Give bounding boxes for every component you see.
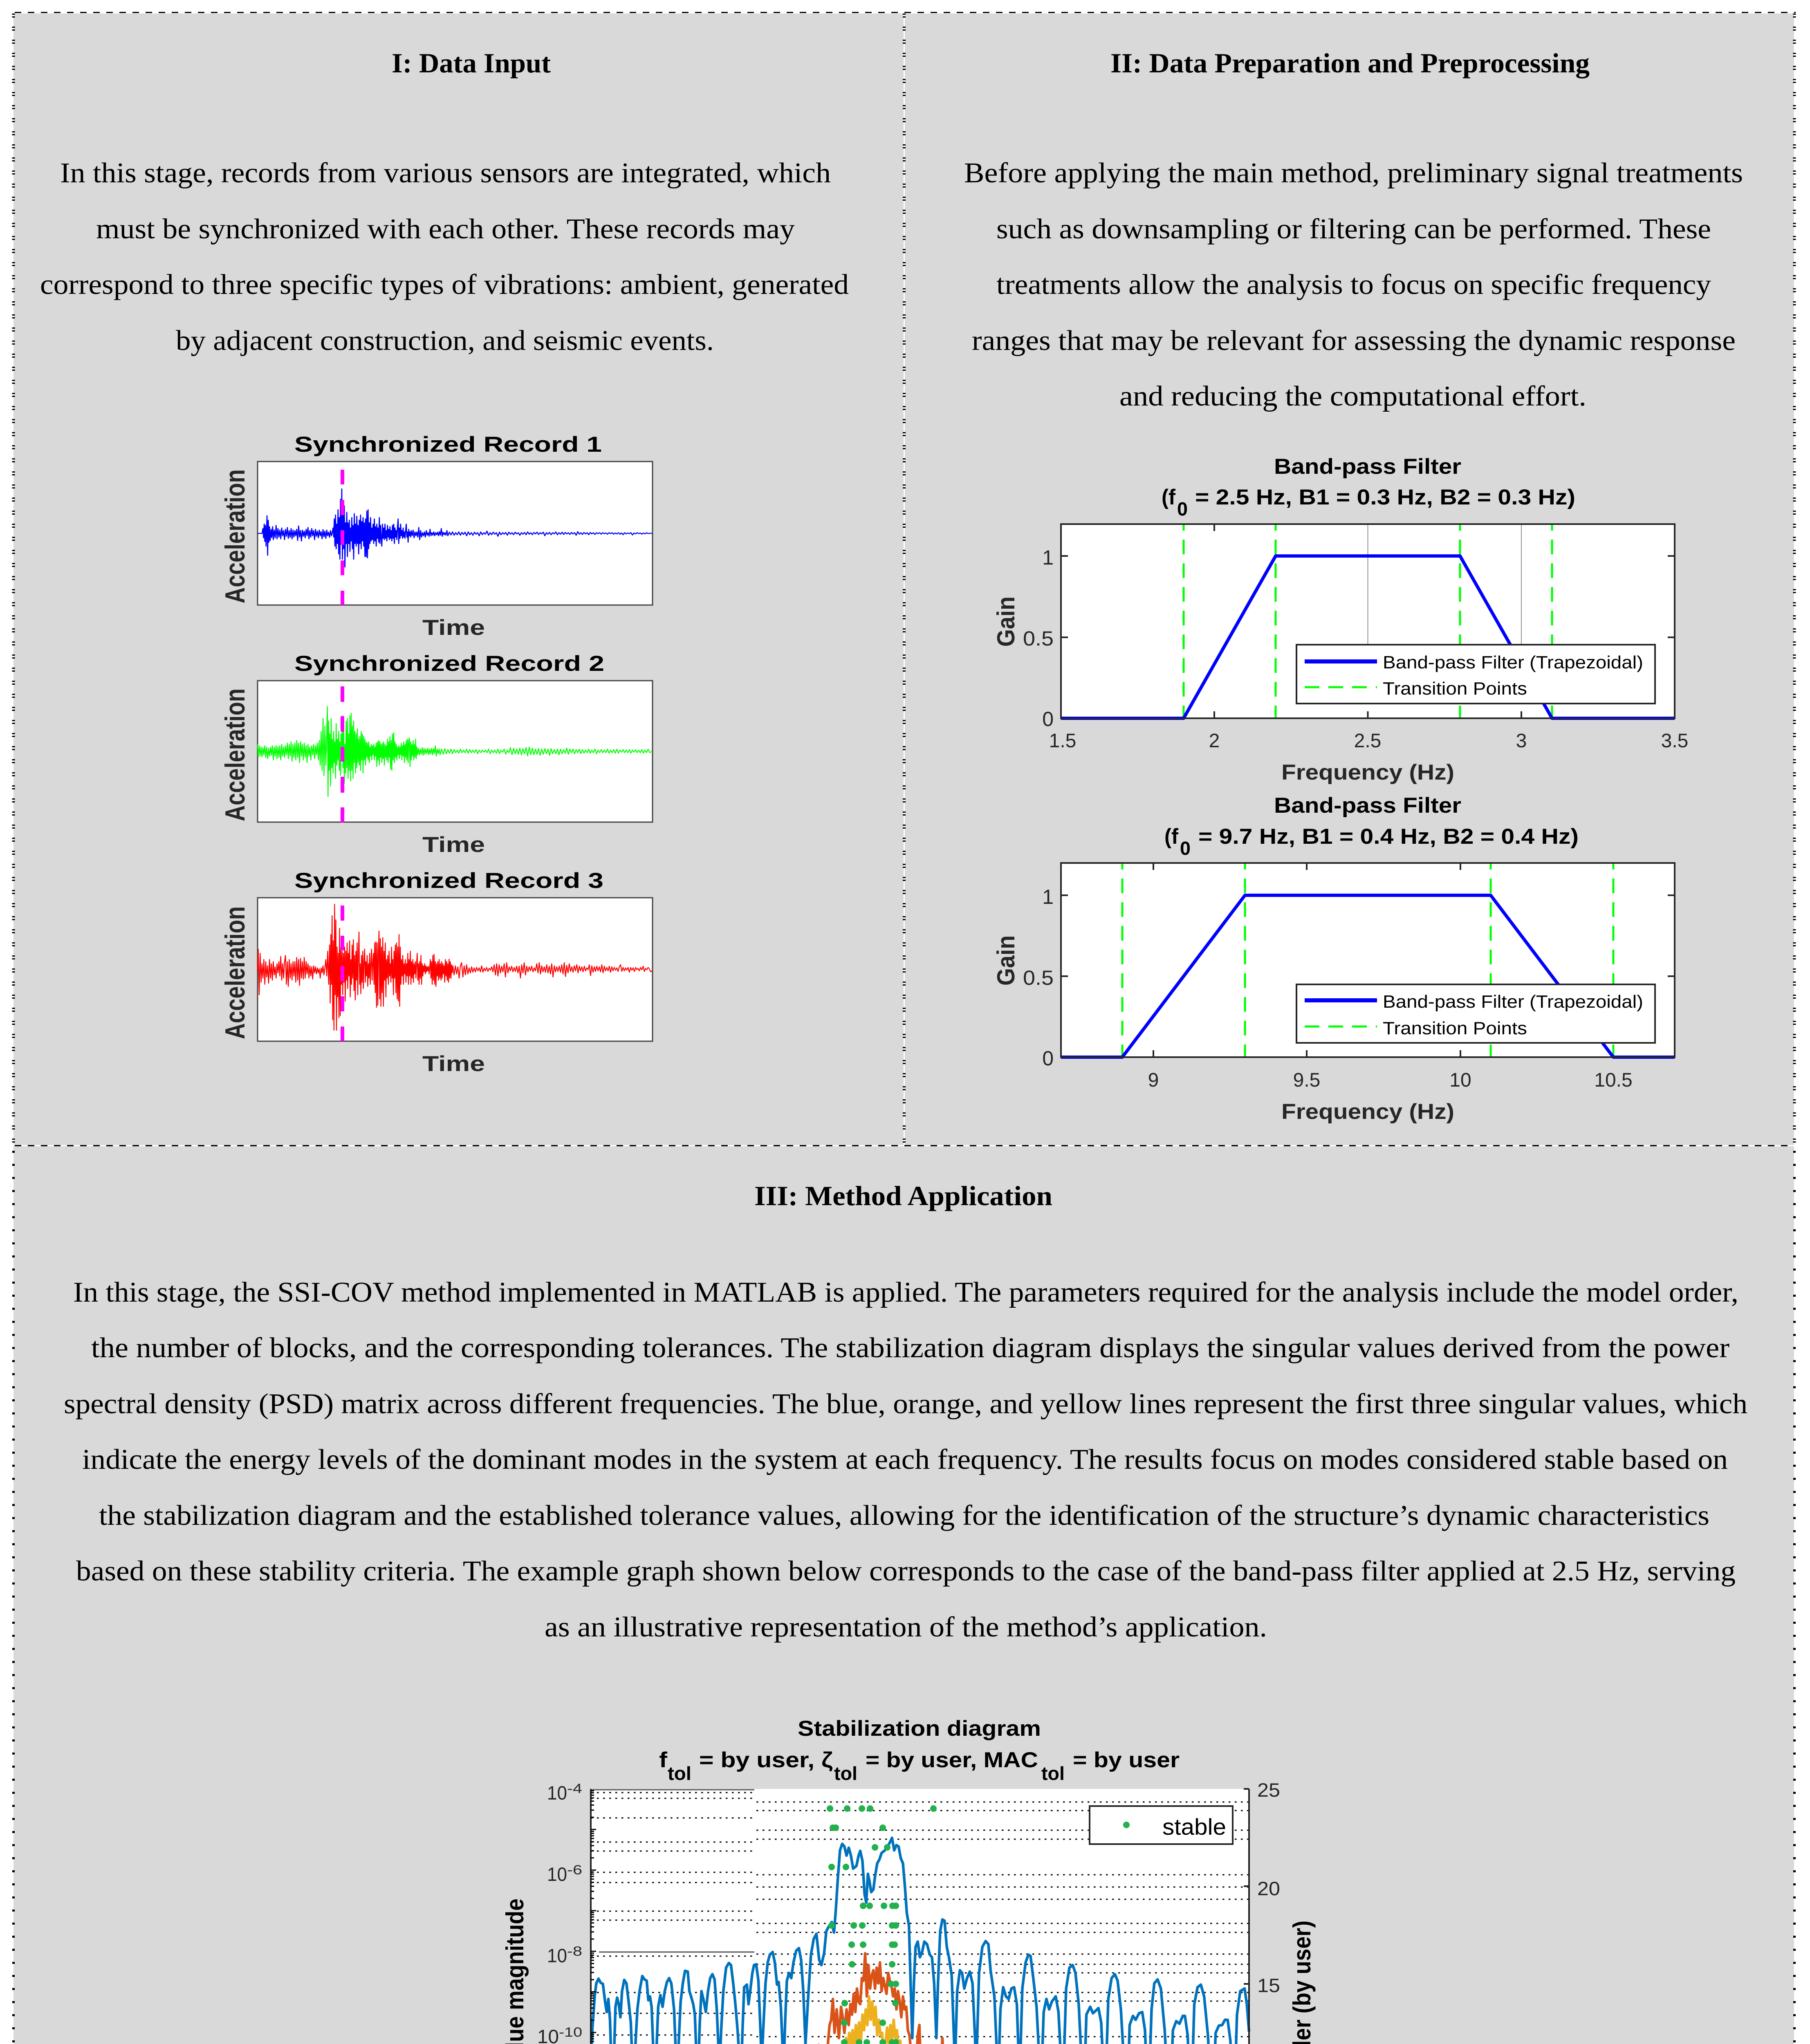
chart title: f	[659, 1748, 667, 1772]
left axis tick labels: 10	[547, 1863, 567, 1885]
chart: band-pass filter at 9.7 Hz	[992, 793, 1675, 1124]
chart title: Stabilization diagram	[798, 1717, 1041, 1741]
chart: band-pass filter at 2.5 Hz: 0.5	[1023, 627, 1054, 650]
chart: synchronized record 3: Synchronized Record 3	[294, 869, 603, 893]
legend: stable	[1090, 1806, 1233, 1844]
left axis tick labels: 10	[547, 1945, 567, 1966]
chart: band-pass filter at 9.7 Hz: 0	[1180, 838, 1191, 859]
text block: method description: based on these stability criteria. The example graph shown below corresponds to the case of the band-pass filter applied at 2.5 Hz, serving	[76, 1555, 1736, 1587]
chart title	[659, 1717, 1180, 1784]
legend: filter and transition points	[1296, 645, 1655, 704]
chart: band-pass filter at 9.7 Hz: 9	[1148, 1069, 1159, 1091]
text block: data input description: must be synchronized with each other. These records may	[96, 213, 795, 245]
left axis tick labels: -10	[559, 2025, 582, 2040]
chart: stabilization diagram	[501, 1717, 1316, 2044]
right axis tick labels	[1257, 1779, 1280, 2044]
chart: band-pass filter at 9.7 Hz: (f	[1164, 825, 1178, 849]
chart: band-pass filter at 9.7 Hz: Band-pass Filter	[1274, 793, 1461, 818]
right axis tick labels: 15	[1257, 1975, 1280, 1996]
stable poles (green dots)	[830, 1809, 933, 2044]
left axis tick labels	[537, 1781, 582, 2044]
chart: band-pass filter at 2.5 Hz: Gain	[992, 596, 1020, 647]
chart: band-pass filter at 2.5 Hz: 1	[1042, 546, 1054, 569]
chart: band-pass filter at 2.5 Hz: = 2.5 Hz, B1 = 0.3 Hz, B2 = 0.3 Hz)	[1195, 485, 1575, 509]
chart: band-pass filter at 9.7 Hz: 1	[1042, 885, 1054, 908]
curve: first singular value (blue)	[591, 1838, 1249, 2044]
chart: band-pass filter at 9.7 Hz: Gain	[992, 935, 1020, 986]
text block: method description: the number of blocks, and the corresponding tolerances. The stabilization diagram displays the singular values derived from the power	[91, 1332, 1729, 1364]
panel: III Method Application	[13, 1146, 1794, 2044]
chart: band-pass filter at 2.5 Hz: 0	[1042, 708, 1054, 731]
chart: synchronized record 1: Time	[422, 616, 485, 640]
chart: synchronized record 2: Acceleration	[220, 688, 251, 821]
chart title: tol	[1041, 1763, 1065, 1784]
chart title: tol	[834, 1763, 857, 1784]
text block: method description	[64, 1277, 1747, 1643]
left axis tick labels: -6	[567, 1862, 582, 1877]
text block: method description: spectral density (PSD) matrix across different frequencies. The blue, orange, and yellow lines represent the first three singular values, which	[64, 1388, 1747, 1420]
chart: band-pass filter at 2.5 Hz: 2.5	[1354, 730, 1381, 752]
chart: band-pass filter at 2.5 Hz: 0	[1177, 498, 1188, 520]
text block: method description: indicate the energy levels of the dominant modes in the system at each frequency. The results focus on modes considered stable based on	[82, 1444, 1728, 1475]
chart: band-pass filter at 9.7 Hz: = 9.7 Hz, B1 = 0.4 Hz, B2 = 0.4 Hz)	[1198, 825, 1579, 849]
legend: filter and transition points: Transition Points	[1383, 1018, 1527, 1038]
right axis tick labels: 25	[1257, 1779, 1280, 1801]
text block: preprocessing description: treatments allow the analysis to focus on specific frequency	[996, 269, 1711, 300]
chart: band-pass filter at 2.5 Hz	[992, 455, 1688, 784]
chart: synchronized record 1	[220, 433, 653, 640]
chart: band-pass filter at 2.5 Hz: 3	[1516, 730, 1527, 752]
text block: data input description	[40, 157, 849, 356]
left axis tick labels: -8	[567, 1944, 582, 1959]
legend: filter and transition points: Band-pass Filter (Trapezoidal)	[1383, 992, 1643, 1012]
curve: second singular value (orange)	[591, 1953, 1249, 2044]
panel: I Data Input	[13, 13, 904, 1145]
chart: synchronized record 1: Acceleration	[220, 469, 251, 603]
chart: band-pass filter at 2.5 Hz: 2	[1209, 730, 1220, 752]
chart: band-pass filter at 9.7 Hz: 9.5	[1293, 1069, 1320, 1091]
heading: II Data Preparation and Preprocessing: II: Data Preparation and Preprocessing	[1110, 47, 1590, 78]
text block: preprocessing description	[964, 157, 1743, 412]
chart: band-pass filter at 9.7 Hz: 0	[1042, 1047, 1054, 1070]
chart: synchronized record 3	[220, 869, 653, 1076]
right axis tick labels: 20	[1257, 1878, 1280, 1899]
chart: band-pass filter at 9.7 Hz: 10.5	[1594, 1069, 1633, 1091]
text block: method description: the stabilization diagram and the established tolerance values, allowing for the identification of the structure’s dynamic characteristics	[99, 1500, 1709, 1531]
chart: synchronized record 2: Synchronized Record 2	[294, 652, 604, 676]
chart: band-pass filter at 2.5 Hz: Frequency (Hz)	[1281, 760, 1454, 784]
chart title: tol	[668, 1763, 691, 1784]
chart: band-pass filter at 2.5 Hz: (f	[1162, 485, 1175, 509]
text block: preprocessing description: ranges that may be relevant for assessing the dynamic response	[972, 325, 1736, 356]
text block: preprocessing description: and reducing the computational effort.	[1119, 381, 1586, 412]
chart: band-pass filter at 2.5 Hz: 3.5	[1661, 730, 1688, 752]
legend: filter and transition points	[1296, 984, 1655, 1043]
chart: band-pass filter at 9.7 Hz: 0.5	[1023, 966, 1054, 989]
chart title: = by user	[1073, 1748, 1180, 1772]
chart: band-pass filter at 9.7 Hz: Frequency (Hz)	[1281, 1100, 1454, 1124]
left axis tick labels: -4	[567, 1781, 582, 1796]
chart title: = by user, MAC	[866, 1748, 1038, 1772]
chart: synchronized record 2	[220, 652, 653, 857]
chart: synchronized record 2: Time	[422, 833, 485, 857]
chart: band-pass filter at 2.5 Hz: 1.5	[1049, 730, 1076, 752]
text block: data input description: In this stage, records from various sensors are integrated, which	[60, 157, 831, 189]
legend: stable: stable	[1162, 1814, 1226, 1840]
axes and ticks	[591, 1789, 1249, 2044]
legend: filter and transition points: Band-pass Filter (Trapezoidal)	[1383, 652, 1643, 672]
text block: data input description: by adjacent construction, and seismic events.	[176, 325, 714, 356]
heading: III Method Application: III: Method Application	[754, 1180, 1052, 1211]
heading: I Data Input: I: Data Input	[392, 47, 551, 78]
curve: third singular value (yellow)	[591, 1996, 1249, 2044]
chart: synchronized record 1: Synchronized Record 1	[294, 433, 602, 457]
panel: II Data Preparation and Preprocessing	[905, 13, 1794, 1145]
chart: synchronized record 3: Acceleration	[220, 906, 251, 1039]
text block: preprocessing description: Before applying the main method, preliminary signal treatments	[964, 157, 1743, 189]
legend: filter and transition points: Transition Points	[1383, 679, 1527, 699]
left axis tick labels: 10	[547, 1782, 567, 1804]
chart: band-pass filter at 9.7 Hz: 10	[1449, 1069, 1471, 1091]
chart title: = by user, ζ	[699, 1748, 833, 1772]
text block: method description: In this stage, the SSI-COV method implemented in MATLAB is applied. The parameters required for the analysis include the model order,	[73, 1277, 1738, 1308]
text block: method description: as an illustrative representation of the method’s application.	[545, 1611, 1267, 1643]
text block: data input description: correspond to three specific types of vibrations: ambient, generated	[40, 269, 849, 300]
text block: preprocessing description: such as downsampling or filtering can be performed. These	[996, 213, 1711, 245]
chart: synchronized record 3: Time	[422, 1052, 485, 1076]
chart: band-pass filter at 2.5 Hz: Band-pass Filter	[1274, 455, 1461, 479]
